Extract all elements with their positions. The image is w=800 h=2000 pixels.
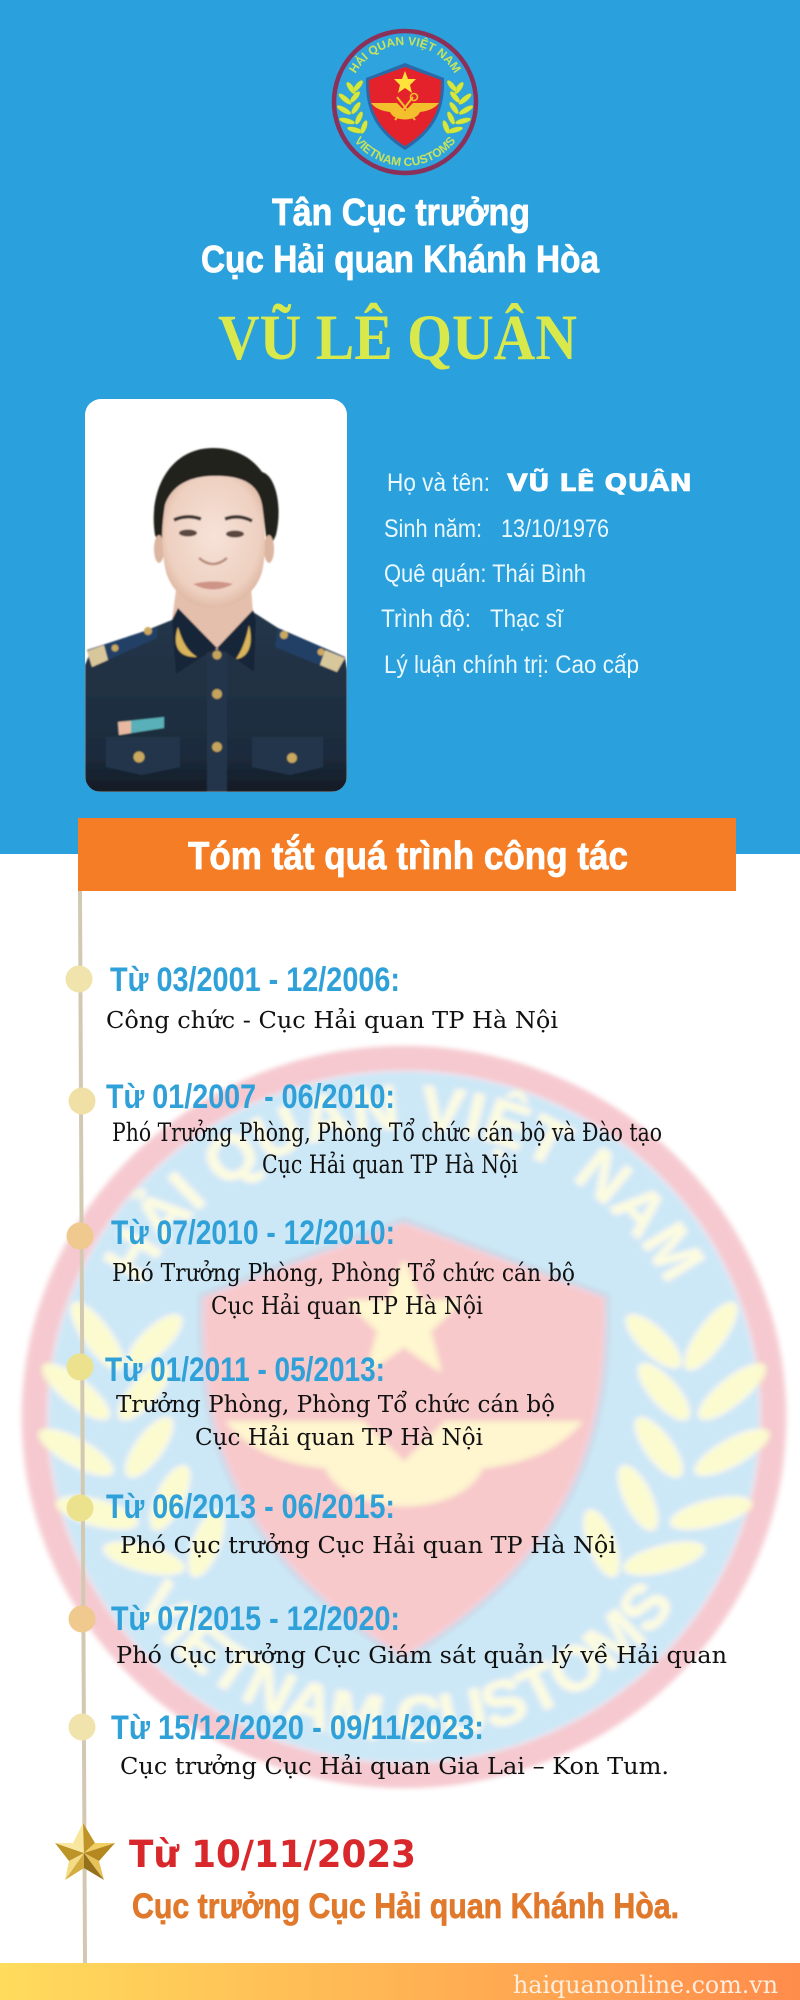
timeline entry 3 xyxy=(66,1214,575,1320)
name headline: VŨ LÊ QUÂN xyxy=(218,302,577,374)
timeline line xyxy=(80,891,85,1963)
birth date: 13/10/1976 xyxy=(501,515,609,543)
timeline entry 4 xyxy=(66,1351,555,1451)
personal details xyxy=(381,467,692,679)
timeline entry 7: Cục trưởng Cục Hải quan Gia Lai – Kon Tum. xyxy=(120,1754,669,1780)
eyes xyxy=(179,530,197,536)
right epaulette xyxy=(274,628,344,666)
timeline entry 4: Cục Hải quan TP Hà Nội xyxy=(195,1425,483,1451)
timeline entry 4: Từ 01/2011 - 05/2013: xyxy=(105,1351,385,1389)
timeline entry 5 xyxy=(66,1488,616,1559)
timeline entry 6: Từ 07/2015 - 12/2020: xyxy=(111,1600,400,1638)
logo: Vietnam Customs emblem xyxy=(332,28,478,176)
banner heading: Tóm tắt quá trình công tác xyxy=(188,834,628,878)
collar xyxy=(172,608,256,674)
logo laurels xyxy=(336,79,474,135)
current post date: Từ 10/11/2023 xyxy=(129,1833,416,1876)
icon: gold star xyxy=(55,1823,115,1880)
orange banner xyxy=(78,818,736,891)
timeline entry 6: Phó Cục trưởng Cục Giám sát quản lý về Hải quan xyxy=(116,1643,727,1669)
nose xyxy=(199,558,227,564)
timeline entry 1: Từ 03/2001 - 12/2006: xyxy=(110,961,400,999)
hometown: Quê quán: Thái Bình xyxy=(384,560,586,588)
timeline entry 3: Cục Hải quan TP Hà Nội xyxy=(211,1291,483,1320)
timeline entry 7 xyxy=(68,1709,669,1780)
collar pins xyxy=(176,625,251,659)
hair xyxy=(154,448,279,552)
buttons xyxy=(212,650,222,660)
timeline entry 2 xyxy=(68,1078,662,1179)
title line 2: Cục Hải quan Khánh Hòa xyxy=(201,239,600,281)
logo top text: HẢI QUAN VIỆT NAM xyxy=(348,36,462,74)
logo shield xyxy=(366,63,444,150)
ears xyxy=(154,535,164,563)
neck xyxy=(171,590,254,651)
full name value: VŨ LÊ QUÂN xyxy=(507,467,692,497)
portrait photo xyxy=(85,399,347,792)
timeline entry 2: Phó Trưởng Phòng, Phòng Tổ chức cán bộ và Đào tạo xyxy=(112,1118,662,1147)
timeline entry 2: Từ 01/2007 - 06/2010: xyxy=(106,1078,395,1116)
pockets xyxy=(106,737,180,775)
political theory: Lý luận chính trị: Cao cấp xyxy=(384,651,639,679)
current post title: Cục trưởng Cục Hải quan Khánh Hòa. xyxy=(132,1887,679,1926)
timeline entry 5: Phó Cục trưởng Cục Hải quan TP Hà Nội xyxy=(120,1533,616,1559)
full name label: Họ và tên: xyxy=(387,469,490,497)
timeline entry 1 xyxy=(66,961,558,1034)
watermark: customs emblem: HẢI QUAN VIỆT NAM xyxy=(101,1082,707,1284)
face xyxy=(162,476,265,608)
timeline entry 2: Cục Hải quan TP Hà Nội xyxy=(262,1150,518,1179)
header blue panel xyxy=(0,0,800,854)
mouth xyxy=(193,582,233,590)
title line 1: Tân Cục trưởng xyxy=(272,192,530,234)
eyebrows xyxy=(174,517,252,521)
timeline entry 5: Từ 06/2013 - 06/2015: xyxy=(106,1488,395,1526)
timeline entry 3: Từ 07/2010 - 12/2010: xyxy=(111,1214,395,1252)
footer band xyxy=(0,1963,800,2000)
left epaulette xyxy=(86,627,158,660)
logo bottom text: VIETNAM CUSTOMS xyxy=(356,136,455,166)
uniform xyxy=(85,608,347,792)
placket xyxy=(207,652,227,792)
watermark: customs emblem: VIETNAM CUSTOMS xyxy=(140,1577,673,1744)
education label: Trình độ: xyxy=(381,605,471,633)
watermark: customs emblem xyxy=(19,1044,789,1790)
timeline entry 1: Công chức - Cục Hải quan TP Hà Nội xyxy=(106,1008,558,1034)
timeline entry 7: Từ 15/12/2020 - 09/11/2023: xyxy=(111,1709,484,1747)
timeline entry 6 xyxy=(68,1600,727,1669)
education value: Thạc sĩ xyxy=(490,605,564,633)
name tag xyxy=(118,717,164,735)
footer website: haiquanonline.com.vn xyxy=(513,1971,778,1999)
timeline entry 3: Phó Trưởng Phòng, Phòng Tổ chức cán bộ xyxy=(112,1258,575,1287)
birth label: Sinh năm: xyxy=(384,515,482,543)
timeline entry 4: Trưởng Phòng, Phòng Tổ chức cán bộ xyxy=(116,1390,555,1418)
